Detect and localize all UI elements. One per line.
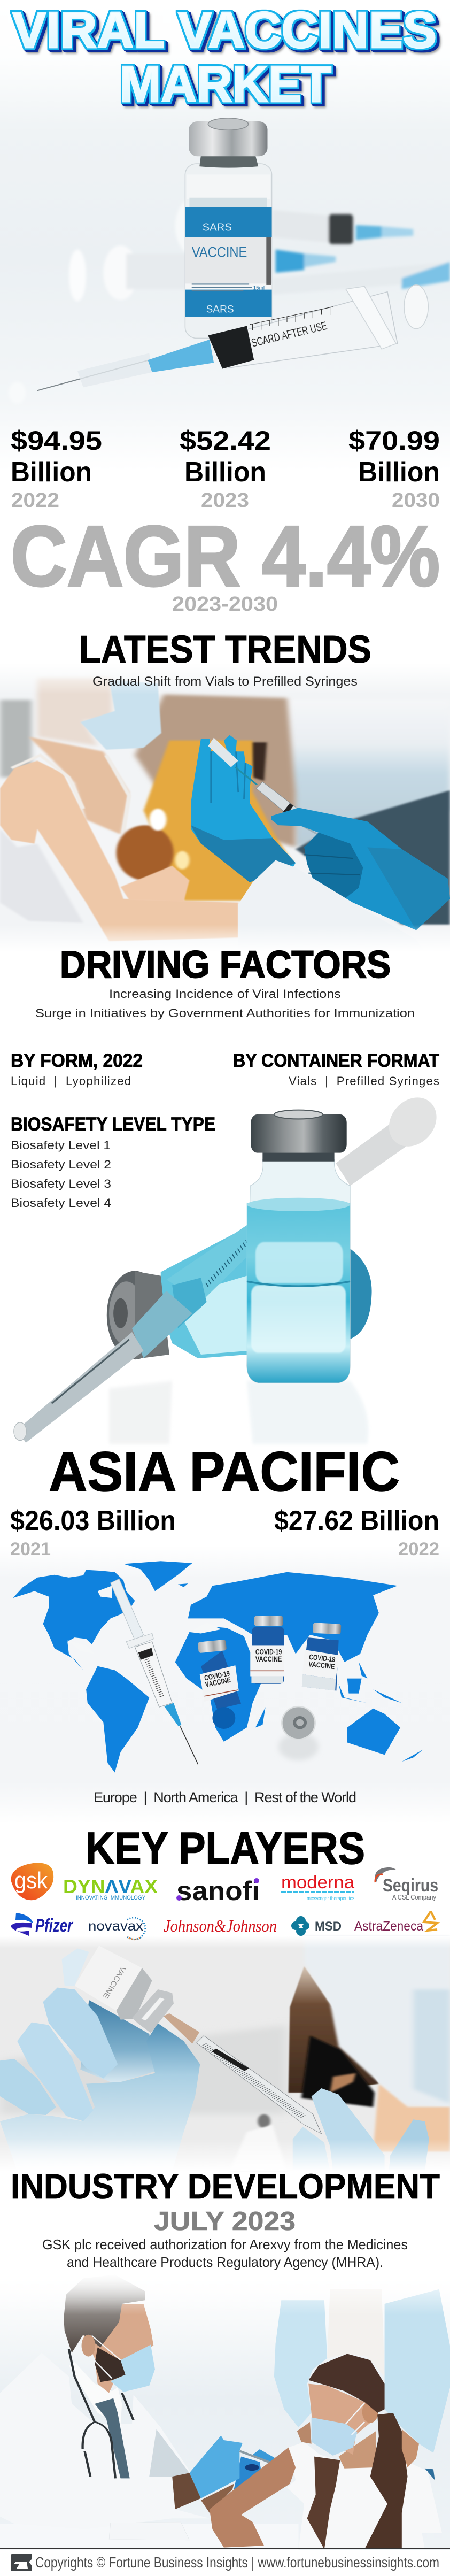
CAGR callout: 2023-2030 — [172, 593, 278, 616]
photo: world map with vaccine vials — [13, 1561, 423, 1773]
driving factors list: Surge in Initiatives by Government Authorities for Immunization — [35, 1006, 415, 1020]
segment: by form — [11, 1050, 143, 1088]
photo: vaccine vial and syringes — [0, 0, 450, 471]
blurred background syringes — [9, 194, 450, 404]
logo: msd: MSD — [315, 1919, 342, 1934]
market figure 2023: Billion — [184, 457, 266, 488]
date: july 2023: JULY 2023 — [154, 2207, 296, 2236]
blurred room and patient — [0, 678, 450, 941]
title: VIRAL VACCINES — [12, 2, 437, 59]
logo: seqirus — [375, 1867, 438, 1901]
icon: vial 2 — [250, 1616, 284, 1684]
market figure 2022 — [11, 426, 102, 512]
logo: moderna: moderna — [281, 1872, 355, 1892]
heading: driving factors: DRIVING FACTORS — [60, 944, 391, 986]
icon: vial 3: VACCINE — [308, 1660, 335, 1671]
logo: gsk: gsk — [14, 1867, 48, 1894]
icon: syringe — [164, 2013, 321, 2134]
icon: gloved hand right — [293, 2088, 429, 2171]
sleeve of white coat — [238, 860, 425, 952]
logo: novavax — [88, 1918, 145, 1940]
logo row 2 — [11, 1911, 437, 1940]
regional value 2021: 2021 — [10, 1539, 51, 1559]
segment: biosafety level type: Biosafety Level 1 — [11, 1139, 111, 1152]
logo: seqirus: Seqirus — [383, 1875, 438, 1896]
icon: vial 3: COVID-19 — [308, 1652, 336, 1664]
icon: blue gloved hand holding syringe — [271, 808, 450, 930]
logo: dynavax: INNOVATING IMMUNOLOGY — [76, 1895, 146, 1901]
standing parent — [274, 2289, 450, 2480]
vial label: VACCINE — [101, 1965, 128, 2001]
segment: biosafety level type — [11, 1114, 215, 1210]
segment: by form: Liquid | Lyophilized — [11, 1074, 131, 1088]
logo: seqirus: A CSL Company — [392, 1893, 436, 1901]
logo: astrazeneca — [354, 1911, 437, 1934]
icon: vial: SARS — [206, 304, 234, 315]
segment: biosafety level type: Biosafety Level 3 — [11, 1177, 111, 1190]
doctor — [0, 2275, 234, 2529]
icon: syringe — [14, 1089, 441, 1443]
icon: upright vial seen from top — [278, 1706, 319, 1760]
market figure 2030: Billion — [358, 457, 440, 488]
segment: biosafety level type: BIOSAFETY LEVEL TYPE — [11, 1114, 215, 1135]
icon: vial 1 — [198, 1640, 242, 1729]
development description: GSK plc received authorization for Arexvy from the Medicines — [42, 2236, 408, 2252]
icon: vial — [185, 118, 272, 338]
icon: vial 2: COVID-19 — [255, 1648, 282, 1656]
logo: moderna — [281, 1872, 355, 1902]
logo: pfizer — [11, 1913, 73, 1936]
logo: msd — [291, 1916, 342, 1936]
market figure 2023 — [180, 426, 271, 512]
logo: gsk — [11, 1863, 53, 1900]
heading: key players: KEY PLAYERS — [86, 1823, 365, 1873]
development description: and Healthcare Products Regulatory Agency (MHRA). — [67, 2254, 383, 2270]
icon: vial 1: VACCINE — [204, 1675, 231, 1689]
icon: syringe: SCARD AFTER USE — [250, 319, 328, 349]
driving factors list: Increasing Incidence of Viral Infections — [109, 987, 341, 1001]
regional value 2022: 2022 — [398, 1539, 439, 1559]
market figure 2023: $52.42 — [180, 426, 271, 456]
icon: vial: VACCINE — [192, 244, 247, 260]
parent hand on right shoulder — [402, 2429, 419, 2467]
regional value 2022 — [274, 1505, 439, 1559]
segment: by form: BY FORM, 2022 — [11, 1050, 143, 1071]
logo: moderna: messenger therapeutics — [307, 1896, 354, 1902]
logo: novavax: novavax — [88, 1919, 144, 1934]
segment: by container format: Vials | Prefilled Syringes — [289, 1074, 439, 1088]
title — [12, 2, 437, 113]
logo: fortune business insights — [11, 2554, 32, 2571]
icon: vial 2: VACCINE — [255, 1655, 282, 1663]
regions list: Europe | North America | Rest of the World — [94, 1789, 356, 1805]
icon: lying vial — [107, 1227, 372, 1359]
logo: dynavax: DYNΛVAX — [63, 1875, 158, 1897]
photo: blue vials and syringe — [14, 1089, 441, 1444]
icon: syringe on map — [111, 1579, 198, 1764]
notebook — [109, 2522, 189, 2540]
segment: by container format — [233, 1050, 439, 1088]
driving factors list — [35, 987, 415, 1020]
icon: gloved hand left — [0, 1948, 200, 2171]
icon: syringe — [37, 285, 428, 390]
regional value 2021: $26.03 Billion — [10, 1505, 176, 1536]
photo: nurse preparing syringe for patient — [0, 663, 450, 952]
child — [210, 2354, 442, 2549]
photo: doctor vaccinating a child — [0, 2271, 450, 2550]
fade overlay — [0, 2271, 450, 2314]
heading: latest trends: LATEST TRENDS — [79, 628, 371, 671]
subtitle: trend: Gradual Shift from Vials to Prefilled Syringes — [92, 674, 358, 689]
icon: vial — [75, 1946, 174, 2033]
heading: asia pacific: ASIA PACIFIC — [49, 1441, 400, 1503]
segment: biosafety level type: Biosafety Level 4 — [11, 1196, 111, 1210]
logo: pfizer: Pfizer — [35, 1916, 73, 1936]
market figure 2022: 2022 — [11, 489, 59, 512]
world map — [13, 1561, 423, 1773]
parent hand on left shoulder — [297, 2422, 312, 2444]
icon: vial 1: COVID-19 — [204, 1669, 230, 1682]
icon: syringe and vial — [208, 737, 324, 838]
icon: vial: SARS — [203, 221, 232, 233]
market figure 2030: $70.99 — [348, 426, 440, 456]
icon: vial: 15ml — [253, 286, 265, 291]
reflection — [109, 1381, 369, 1444]
regional value 2022: $27.62 Billion — [274, 1505, 439, 1536]
market figure 2030: 2030 — [392, 489, 440, 512]
icon: upright vial — [247, 1110, 350, 1383]
market figure 2030 — [348, 426, 440, 512]
title: MARKET — [120, 56, 331, 113]
market figure 2023: 2023 — [201, 489, 249, 512]
icon: blue gloved hand holding vial — [191, 735, 296, 882]
footer rule — [0, 2548, 450, 2549]
map background — [0, 1545, 450, 1824]
photo: gloved hands with vaccine vial and syringe — [0, 1936, 450, 2171]
icon: blue gloves and syringe — [189, 2435, 276, 2498]
regional value 2021 — [10, 1505, 176, 1559]
development description — [42, 2236, 408, 2270]
logo: astrazeneca: AstraZeneca — [354, 1919, 423, 1934]
white coast cuts — [67, 1586, 221, 1654]
market figure 2022: $94.95 — [11, 426, 102, 456]
logo: sanofi: sanofi — [176, 1876, 260, 1906]
icon: vial 3 — [302, 1623, 341, 1691]
logo: johnson and johnson: Johnson&Johnson — [164, 1916, 277, 1935]
logo row 1 — [11, 1863, 438, 1906]
market figure 2022: Billion — [11, 457, 92, 488]
segment: biosafety level type: Biosafety Level 2 — [11, 1158, 111, 1171]
